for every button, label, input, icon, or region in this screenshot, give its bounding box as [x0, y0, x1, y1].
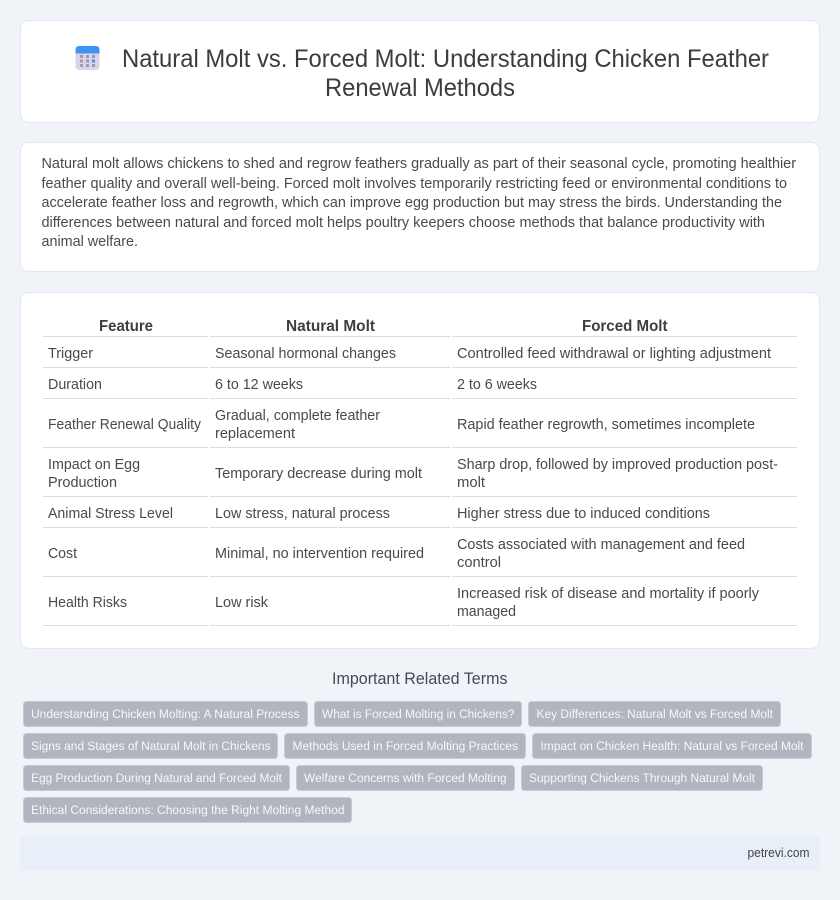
- table row: feather renewal quality: replacement: [215, 426, 295, 442]
- tag: [522, 766, 762, 790]
- table row: trigger: [48, 346, 771, 362]
- tag: Methods Used in Forced Molting Practices: [292, 739, 518, 753]
- table row: health risks: Low risk: [215, 595, 269, 611]
- table row: duration: 6 to 12 weeks: [215, 377, 303, 393]
- table row: cost: Minimal, no intervention required: [215, 546, 424, 562]
- table row: cost: Costs associated with management and feed: [457, 537, 745, 553]
- tag: Ethical Considerations: Choosing the Right Molting Method: [31, 803, 345, 817]
- heading: important related terms: Important Related Terms: [332, 670, 508, 688]
- table row: impact on egg production: Sharp drop, followed by improved production post-: [457, 457, 778, 473]
- table row: feather renewal quality: Gradual, complete feather: [215, 408, 380, 424]
- tag: [532, 734, 812, 758]
- text block: introduction paragraph: Natural molt allows chickens to shed and regrow feathers gradually as part of their seasonal cycle, promoting healthier: [42, 156, 796, 172]
- table row: impact on egg production: Impact on Egg: [48, 457, 140, 473]
- table row: feather renewal quality: Rapid feather regrowth, sometimes incomplete: [457, 417, 755, 433]
- table row: feather renewal quality: [48, 408, 755, 442]
- table row: cost: [48, 537, 745, 571]
- panel: important related terms: [24, 670, 812, 822]
- tag: [24, 734, 278, 758]
- text block: introduction paragraph: feather quality and overall well-being. Forced molt involves temporarily restricting feed or environmental conditions to: [42, 176, 787, 192]
- table header row: [99, 318, 668, 335]
- text block: introduction paragraph: accelerate feather loss and regrowth, which can improve egg production but may stress the birds. Understanding the: [42, 195, 782, 211]
- title: Natural Molt vs. Forced Molt: Understanding Chicken Feather: [122, 45, 769, 73]
- table row: trigger: Trigger: [48, 346, 93, 362]
- tag: Welfare Concerns with Forced Molting: [304, 771, 507, 785]
- tag: [314, 702, 522, 726]
- table row: duration: [48, 377, 537, 393]
- table row: health risks: [48, 586, 760, 620]
- tag: Key Differences: Natural Molt vs Forced Molt: [536, 707, 774, 721]
- table row: impact on egg production: Production: [48, 475, 117, 491]
- title: [122, 45, 769, 102]
- text block: introduction paragraph: animal welfare.: [42, 234, 138, 250]
- tag: [296, 766, 514, 790]
- table header row: Feature: [99, 318, 153, 335]
- icon: calendar: [76, 46, 100, 70]
- tag: [284, 734, 526, 758]
- table row: animal stress level: [48, 506, 710, 522]
- tag: Supporting Chickens Through Natural Molt: [529, 771, 756, 785]
- tag: [24, 766, 290, 790]
- panel: title header: [20, 20, 820, 122]
- panel: comparison table: [20, 292, 820, 648]
- table row: trigger: Controlled feed withdrawal or lighting adjustment: [457, 346, 771, 362]
- table header row: Forced Molt: [582, 318, 668, 335]
- tag: [24, 798, 352, 822]
- table row: impact on egg production: Temporary decrease during molt: [215, 466, 422, 482]
- tag: [528, 702, 780, 726]
- table row: animal stress level: Animal Stress Level: [48, 506, 173, 522]
- tag: Understanding Chicken Molting: A Natural Process: [31, 707, 300, 721]
- table row: cost: Cost: [48, 546, 77, 562]
- title: Renewal Methods: [325, 74, 515, 102]
- tag: [24, 702, 308, 726]
- tag: Egg Production During Natural and Forced Molt: [31, 771, 283, 785]
- table row: health risks: Health Risks: [48, 595, 127, 611]
- tag: Impact on Chicken Health: Natural vs Forced Molt: [540, 739, 804, 753]
- table row: animal stress level: Low stress, natural process: [215, 506, 390, 522]
- table row: duration: 2 to 6 weeks: [457, 377, 537, 393]
- table row: health risks: Increased risk of disease and mortality if poorly: [457, 586, 760, 602]
- text block: introduction paragraph: differences between natural and forced molt helps poultry keepers choose methods that balance productivity with: [42, 215, 765, 231]
- tag: What is Forced Molting in Chickens?: [322, 707, 515, 721]
- footer: [20, 836, 820, 870]
- table row: animal stress level: Higher stress due to induced conditions: [457, 506, 710, 522]
- table row: duration: Duration: [48, 377, 102, 393]
- table row: trigger: Seasonal hormonal changes: [215, 346, 396, 362]
- footer: petrevi.com: [748, 845, 810, 860]
- text block: introduction paragraph: [42, 156, 796, 250]
- table row: feather renewal quality: Feather Renewal Quality: [48, 417, 202, 433]
- table row: impact on egg production: molt: [457, 475, 485, 491]
- table header row: Natural Molt: [286, 318, 376, 335]
- table row: cost: control: [457, 555, 501, 571]
- table row: health risks: managed: [457, 604, 516, 620]
- tag: Signs and Stages of Natural Molt in Chickens: [31, 739, 270, 753]
- panel: introduction: [20, 142, 820, 272]
- table row: impact on egg production: [48, 457, 778, 491]
